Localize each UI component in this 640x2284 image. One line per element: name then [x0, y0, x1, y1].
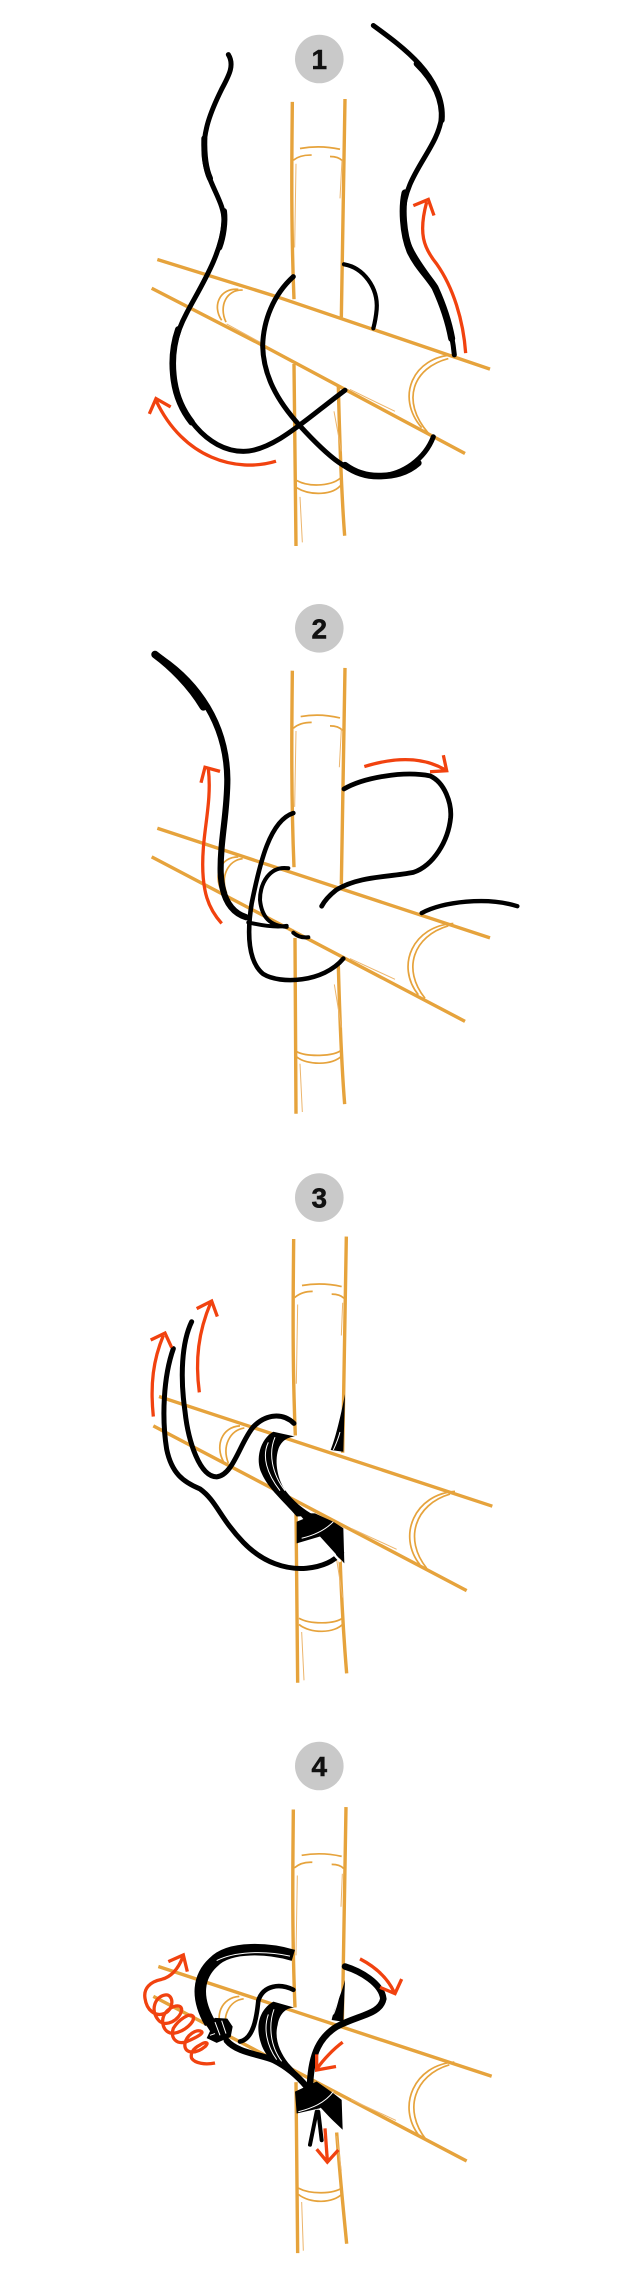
step number 1: [295, 35, 344, 83]
drawing: step 2 lashing: [152, 654, 517, 1114]
arrow: tail down: [317, 2128, 338, 2162]
arrow: second strand up: [197, 1301, 217, 1392]
rope: [155, 654, 517, 980]
horizontal bamboo: [152, 828, 490, 1021]
vertical bamboo: [292, 99, 345, 546]
arrow: loop down right: [360, 1959, 402, 1994]
horizontal bamboo: [153, 1397, 492, 1591]
arrow: right strand up: [413, 199, 466, 353]
arrow: left strand up: [151, 1333, 172, 1417]
drawing: step 3 lashing: [151, 1237, 492, 1683]
rope and wraps: [164, 1322, 345, 1568]
vertical bamboo: [293, 1237, 347, 1683]
arrow: left strand up: [201, 767, 222, 923]
rope and wraps: [200, 1950, 383, 2145]
arrow: strand down left: [317, 2042, 343, 2070]
step number 4: 4: [312, 1751, 328, 1782]
arrow: loop right: [364, 755, 447, 772]
step number 3: [295, 1173, 344, 1222]
arrow: coil: [145, 1955, 215, 2064]
horizontal bamboo: [152, 260, 490, 454]
drawing: step 1 lashing: [149, 25, 490, 546]
panel: step 2: [152, 604, 517, 1114]
knot: [206, 2018, 233, 2043]
step number 2: 2: [312, 613, 327, 644]
panel: step 3: [151, 1173, 492, 1683]
arrow: left strand round: [149, 399, 276, 465]
panel: step 1: [149, 25, 490, 546]
vertical bamboo: [293, 1807, 347, 2253]
rope: [173, 25, 454, 476]
step number 1: 1: [312, 44, 327, 75]
panel: step 4: [145, 1742, 492, 2253]
vertical bamboo: [292, 668, 345, 1114]
step number 4: [295, 1742, 344, 1790]
drawing: step 4 lashing: [153, 1807, 492, 2253]
step number 3: 3: [312, 1183, 327, 1214]
horizontal bamboo: [153, 1967, 492, 2161]
step number 2: [295, 604, 344, 653]
